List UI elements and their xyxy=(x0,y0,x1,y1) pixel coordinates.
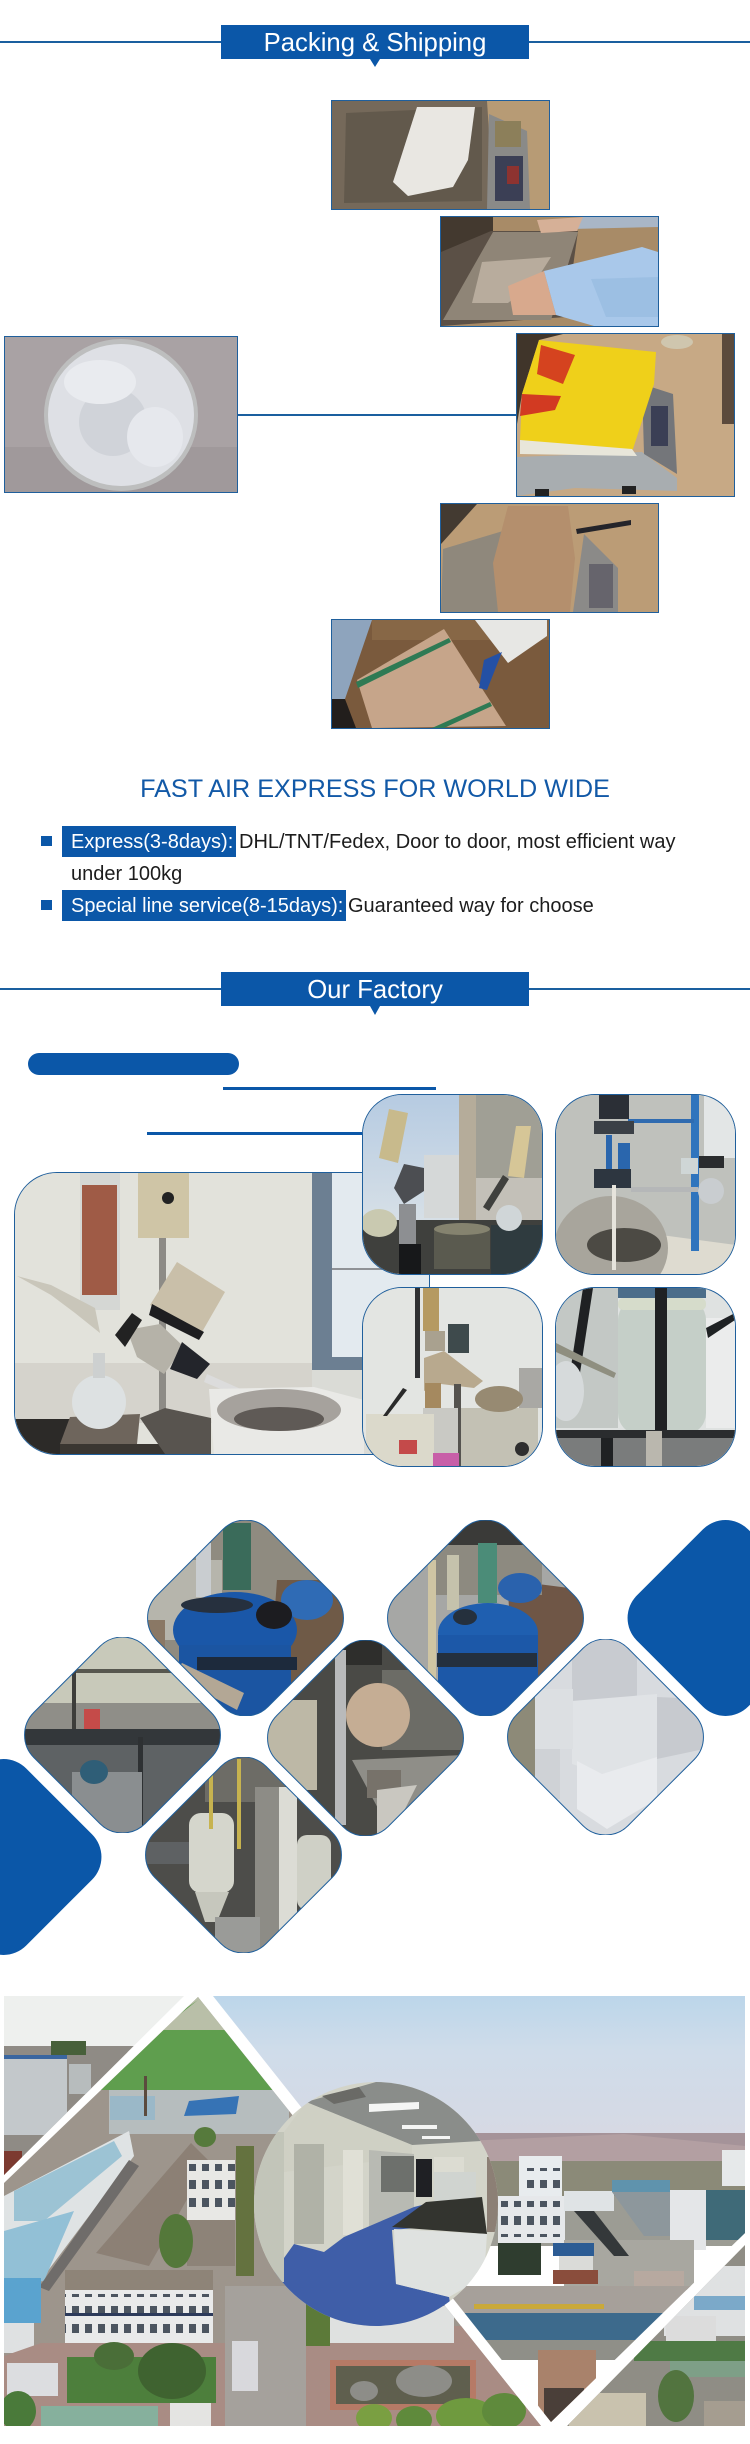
heading: fast air express: FAST AIR EXPRESS FOR WORLD WIDE xyxy=(140,775,610,803)
diamond: blue left xyxy=(0,1759,102,1955)
collage: lower right campus xyxy=(567,2245,745,2426)
text: express detail: DHL/TNT/Fedex, Door to door, most efficient way xyxy=(239,831,675,853)
diamond photo: white panels xyxy=(507,1639,704,1835)
label: express xyxy=(62,826,236,857)
section rule: packing left xyxy=(0,41,221,43)
photo: evaporator with chiller xyxy=(362,1287,543,1467)
bullet: special line xyxy=(41,900,52,910)
heading: Our Factory: Our Factory xyxy=(307,976,443,1004)
photo: DHL bag on scale xyxy=(516,333,735,497)
photo: rotary evaporator large xyxy=(14,1172,430,1455)
text: special line detail: Guaranteed way for choose xyxy=(348,895,594,917)
photo: glass reactor in frame xyxy=(555,1287,736,1467)
label: special line: Special line service(8-15days): xyxy=(71,895,343,917)
text: express detail line 2: under 100kg xyxy=(71,863,182,885)
bar: upper xyxy=(223,1087,436,1090)
photo: gloved hands with foil bag xyxy=(440,216,659,327)
heading: Packing & Shipping: Packing & Shipping xyxy=(264,29,486,57)
connector line xyxy=(238,414,516,416)
photo: cardboard box on scale xyxy=(440,503,659,613)
photo: white bag on scale xyxy=(331,100,550,210)
diamond photo: blue reactor 5 xyxy=(147,1520,344,1716)
photo: strapped parcel on wood xyxy=(331,619,550,729)
photo: rotary evaporators by window xyxy=(362,1094,543,1275)
section rule: packing right xyxy=(529,41,750,43)
collage: upper left building xyxy=(4,1996,184,2176)
photo collage: factory campus xyxy=(4,1996,745,2426)
photo: glass reactor flask xyxy=(555,1094,736,1275)
label: special line xyxy=(62,890,346,921)
bullet: express xyxy=(41,836,52,846)
diamond photo: horizontal tank xyxy=(267,1640,464,1836)
diamond photo: blue reactor 2 xyxy=(387,1520,584,1716)
diamond photo: white vessels xyxy=(145,1757,342,1953)
collage: street view xyxy=(213,1996,745,2422)
collage: lab interior circle xyxy=(254,2082,498,2327)
heading: Packing & Shipping xyxy=(221,25,529,59)
pill bar xyxy=(28,1053,239,1075)
collage: campus aerial xyxy=(4,1997,541,2426)
photo: product crystals in dish xyxy=(4,336,238,493)
diamond photo: steel platform xyxy=(24,1637,221,1833)
heading: Our Factory xyxy=(221,972,529,1006)
heading pointer: factory xyxy=(370,1006,380,1015)
bar: lower xyxy=(147,1132,362,1135)
section rule: factory right xyxy=(529,988,750,990)
section rule: factory left xyxy=(0,988,221,990)
label: express: Express(3-8days): xyxy=(71,831,233,853)
heading pointer: packing xyxy=(370,59,380,67)
diamond: blue right xyxy=(628,1520,750,1716)
